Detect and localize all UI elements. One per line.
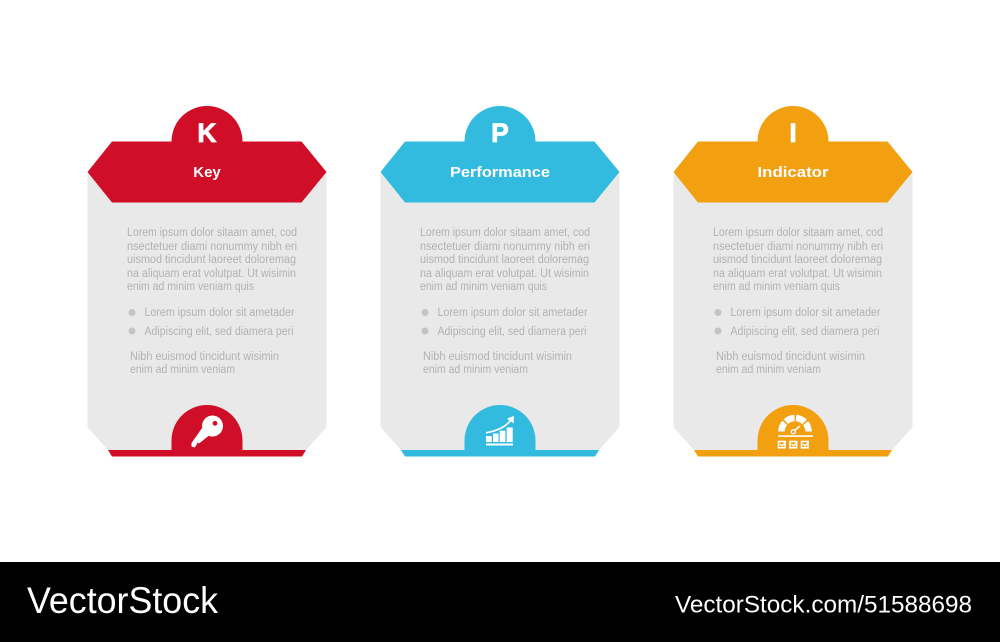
panel: Indicator bbox=[674, 106, 912, 456]
bottom bar bbox=[694, 450, 892, 456]
closing paragraph bbox=[423, 351, 572, 376]
footer bar bbox=[0, 562, 1000, 642]
body paragraph bbox=[420, 227, 590, 293]
icon: gauge with checkboxes bbox=[778, 418, 813, 448]
letter P: P bbox=[491, 118, 509, 148]
body paragraph: na aliquam erat volutpat. Ut wisimin bbox=[127, 268, 296, 280]
bullet list bbox=[714, 307, 881, 338]
footer image id: VectorStock.com/51588698 bbox=[675, 592, 972, 618]
letter K: K bbox=[197, 118, 217, 148]
bottom tab circle bbox=[758, 405, 828, 450]
body paragraph: Lorem ipsum dolor sitaam amet, cod bbox=[420, 227, 590, 239]
body paragraph bbox=[127, 227, 297, 293]
bottom bar bbox=[108, 450, 306, 456]
body paragraph: enim ad minim veniam quis bbox=[713, 281, 840, 293]
icon: key bbox=[192, 416, 223, 448]
body paragraph: uismod tincidunt laoreet doloremag bbox=[713, 254, 882, 266]
body paragraph: Lorem ipsum dolor sitaam amet, cod bbox=[127, 227, 297, 239]
top tab circle bbox=[464, 106, 536, 177]
card background bbox=[674, 172, 912, 450]
body paragraph: na aliquam erat volutpat. Ut wisimin bbox=[420, 268, 589, 280]
bottom tab circle bbox=[464, 405, 536, 450]
bullet list: Lorem ipsum dolor sit ametader bbox=[730, 307, 881, 319]
body paragraph: nsectetuer diami nonummy nibh eri bbox=[420, 241, 590, 253]
body paragraph: nsectetuer diami nonummy nibh eri bbox=[127, 241, 297, 253]
footer logo: VectorStock bbox=[27, 580, 218, 621]
body paragraph: uismod tincidunt laoreet doloremag bbox=[420, 254, 589, 266]
closing paragraph: enim ad minim veniam bbox=[716, 364, 821, 376]
body paragraph: enim ad minim veniam quis bbox=[127, 281, 254, 293]
closing paragraph bbox=[130, 351, 279, 376]
bottom bar bbox=[401, 450, 599, 456]
bullet list bbox=[422, 307, 588, 338]
heading: Key: Key bbox=[193, 164, 221, 181]
body paragraph: uismod tincidunt laoreet doloremag bbox=[127, 254, 296, 266]
header banner bbox=[88, 142, 326, 202]
closing paragraph: enim ad minim veniam bbox=[423, 364, 528, 376]
card background bbox=[88, 172, 326, 450]
header banner bbox=[380, 142, 620, 202]
closing paragraph: Nibh euismod tincidunt wisimin bbox=[716, 351, 865, 363]
body paragraph bbox=[713, 227, 883, 293]
bullet list: Adipiscing elit, sed diamera peri bbox=[438, 326, 586, 338]
body paragraph: nsectetuer diami nonummy nibh eri bbox=[713, 241, 883, 253]
body paragraph: enim ad minim veniam quis bbox=[420, 281, 547, 293]
top tab circle bbox=[172, 106, 242, 177]
bullet list: Lorem ipsum dolor sit ametader bbox=[438, 307, 588, 319]
heading: Indicator: Indicator bbox=[758, 164, 829, 181]
letter I: I bbox=[789, 118, 797, 148]
closing paragraph: Nibh euismod tincidunt wisimin bbox=[423, 351, 572, 363]
heading: Performance: Performance bbox=[450, 164, 550, 181]
card background bbox=[380, 172, 620, 450]
closing paragraph: Nibh euismod tincidunt wisimin bbox=[130, 351, 279, 363]
top tab circle bbox=[758, 106, 828, 177]
bottom tab circle bbox=[172, 405, 242, 450]
closing paragraph bbox=[716, 351, 865, 376]
closing paragraph: enim ad minim veniam bbox=[130, 364, 235, 376]
bullet list: Adipiscing elit, sed diamera peri bbox=[144, 326, 294, 338]
panel: Performance bbox=[380, 106, 620, 456]
body paragraph: Lorem ipsum dolor sitaam amet, cod bbox=[713, 227, 883, 239]
bullet list bbox=[128, 307, 295, 338]
bullet list: Lorem ipsum dolor sit ametader bbox=[144, 307, 295, 319]
panel: Key bbox=[88, 106, 326, 456]
bullet list: Adipiscing elit, sed diamera peri bbox=[730, 326, 880, 338]
icon: growth chart bbox=[486, 416, 514, 446]
header banner bbox=[674, 142, 912, 202]
body paragraph: na aliquam erat volutpat. Ut wisimin bbox=[713, 268, 882, 280]
